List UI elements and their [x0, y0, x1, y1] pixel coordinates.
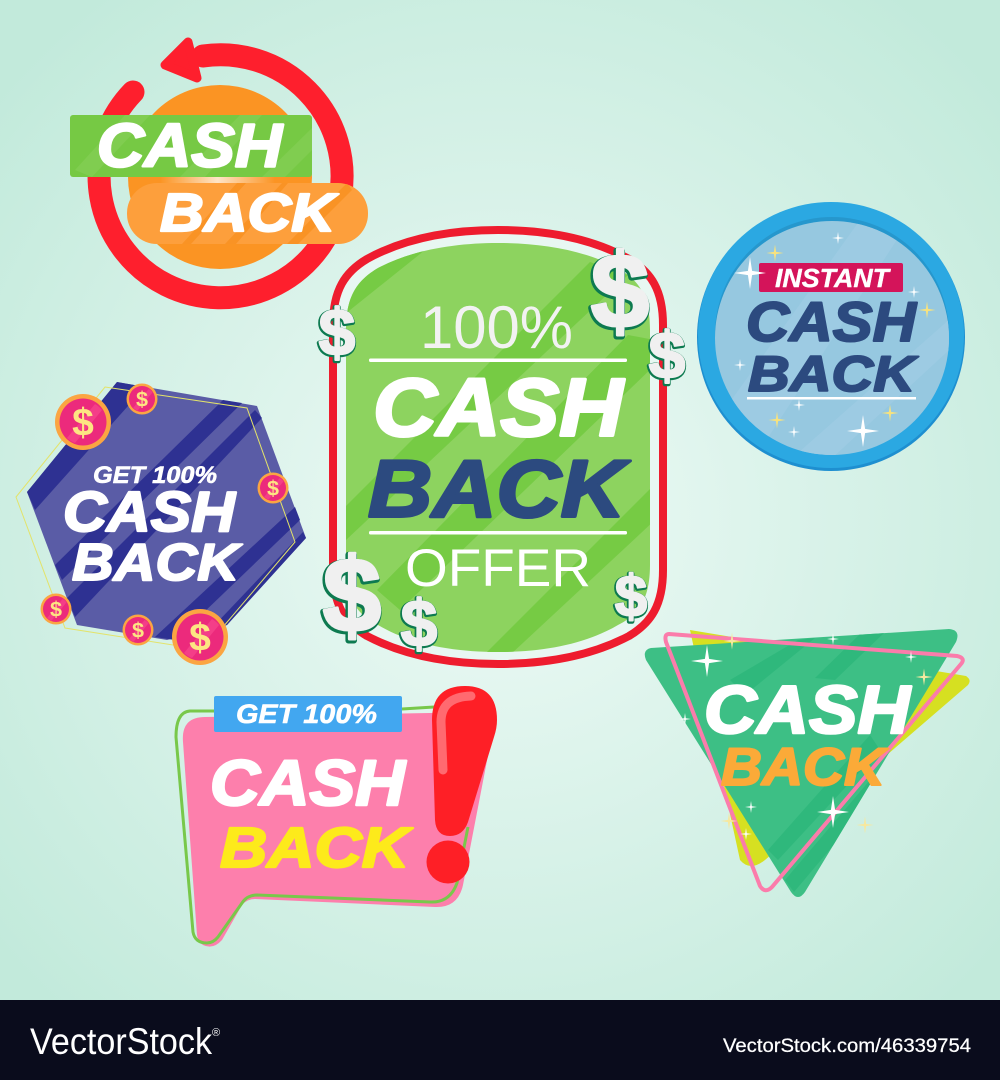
yellow triangle: [690, 630, 970, 866]
icons: dollar signs: $: [648, 319, 685, 393]
inner disc: [715, 217, 949, 451]
footer bar: [0, 1000, 1000, 1080]
blue ring: [697, 203, 965, 471]
highlight between banners: [160, 177, 275, 183]
text: get 100%: GET 100%: [93, 462, 217, 489]
badge: refresh cash back: [70, 42, 368, 298]
registered mark: ®: [212, 1027, 220, 1039]
green panel: [346, 243, 650, 652]
icons: dollar signs: $: [400, 587, 437, 661]
text: cash: CASH: [63, 480, 237, 544]
green outline: [176, 707, 468, 943]
sparkles: white: [734, 232, 920, 447]
green banner: cash: CASH: [97, 112, 284, 180]
icons: dollar signs: $: [591, 233, 649, 350]
badge: instant cash back: [697, 202, 965, 471]
sparkles: yellow: [720, 632, 932, 834]
text: cash: CASH: [746, 290, 918, 353]
text: back: BACK: [748, 346, 919, 402]
red outer frame: [333, 230, 663, 664]
icons: dollar signs: $: [615, 564, 647, 629]
text: back: BACK: [721, 738, 889, 797]
orange circle: [128, 85, 312, 269]
icons: dollar signs: $: [401, 586, 437, 660]
badge: hexagon get 100%: [16, 382, 306, 665]
text: cash: CASH: [704, 672, 912, 748]
label: get 100%: GET 100%: [236, 699, 377, 729]
sparkles: white: [679, 633, 917, 840]
sparkles: yellow: [766, 244, 936, 428]
orange banner: back: [127, 183, 368, 244]
brand wordmark: VectorStock: [30, 1021, 212, 1062]
disc stripes: [732, 224, 949, 455]
text: back: BACK: [220, 816, 413, 880]
icons: coins: [40, 384, 288, 665]
triangle stripes: [730, 632, 885, 892]
icons: dollar signs: $: [649, 318, 685, 392]
green triangle: [645, 629, 957, 897]
icons: dollar signs: [318, 233, 685, 661]
text: cash: CASH: [373, 362, 625, 454]
pink outline: [665, 634, 963, 890]
icons: dollar signs: $: [322, 538, 380, 656]
text: back: BACK: [72, 534, 243, 592]
icons: dollar signs: $: [614, 565, 647, 630]
hexagon panel: [27, 382, 306, 640]
badge: central 100% cash back offer: [318, 230, 685, 664]
text: back: BACK: [368, 444, 631, 534]
text: 100%: 100%: [420, 294, 573, 361]
image id: VectorStock.com/46339754: [723, 1036, 971, 1057]
thin outline: [16, 387, 295, 645]
label: instant: INSTANT: [775, 263, 891, 293]
badge: speech bubble: [176, 686, 497, 947]
icons: dollar signs: $: [319, 295, 355, 369]
icons: dollar signs: $: [323, 537, 381, 654]
text: offer: OFFER: [405, 539, 591, 598]
label: get 100%: [214, 696, 402, 732]
orange banner: back: BACK: [160, 183, 339, 243]
badge: triangle: [645, 629, 970, 897]
pink bubble: [183, 712, 490, 947]
hexagon stripes: [27, 382, 306, 640]
icon: exclamation mark: [426, 686, 497, 884]
icons: dollar signs: $: [318, 296, 355, 370]
panel stripes: [340, 240, 655, 655]
icon: red circular arrow: [99, 42, 342, 298]
text: cash: CASH: [210, 747, 407, 819]
icons: dollar signs: $: [590, 234, 648, 352]
